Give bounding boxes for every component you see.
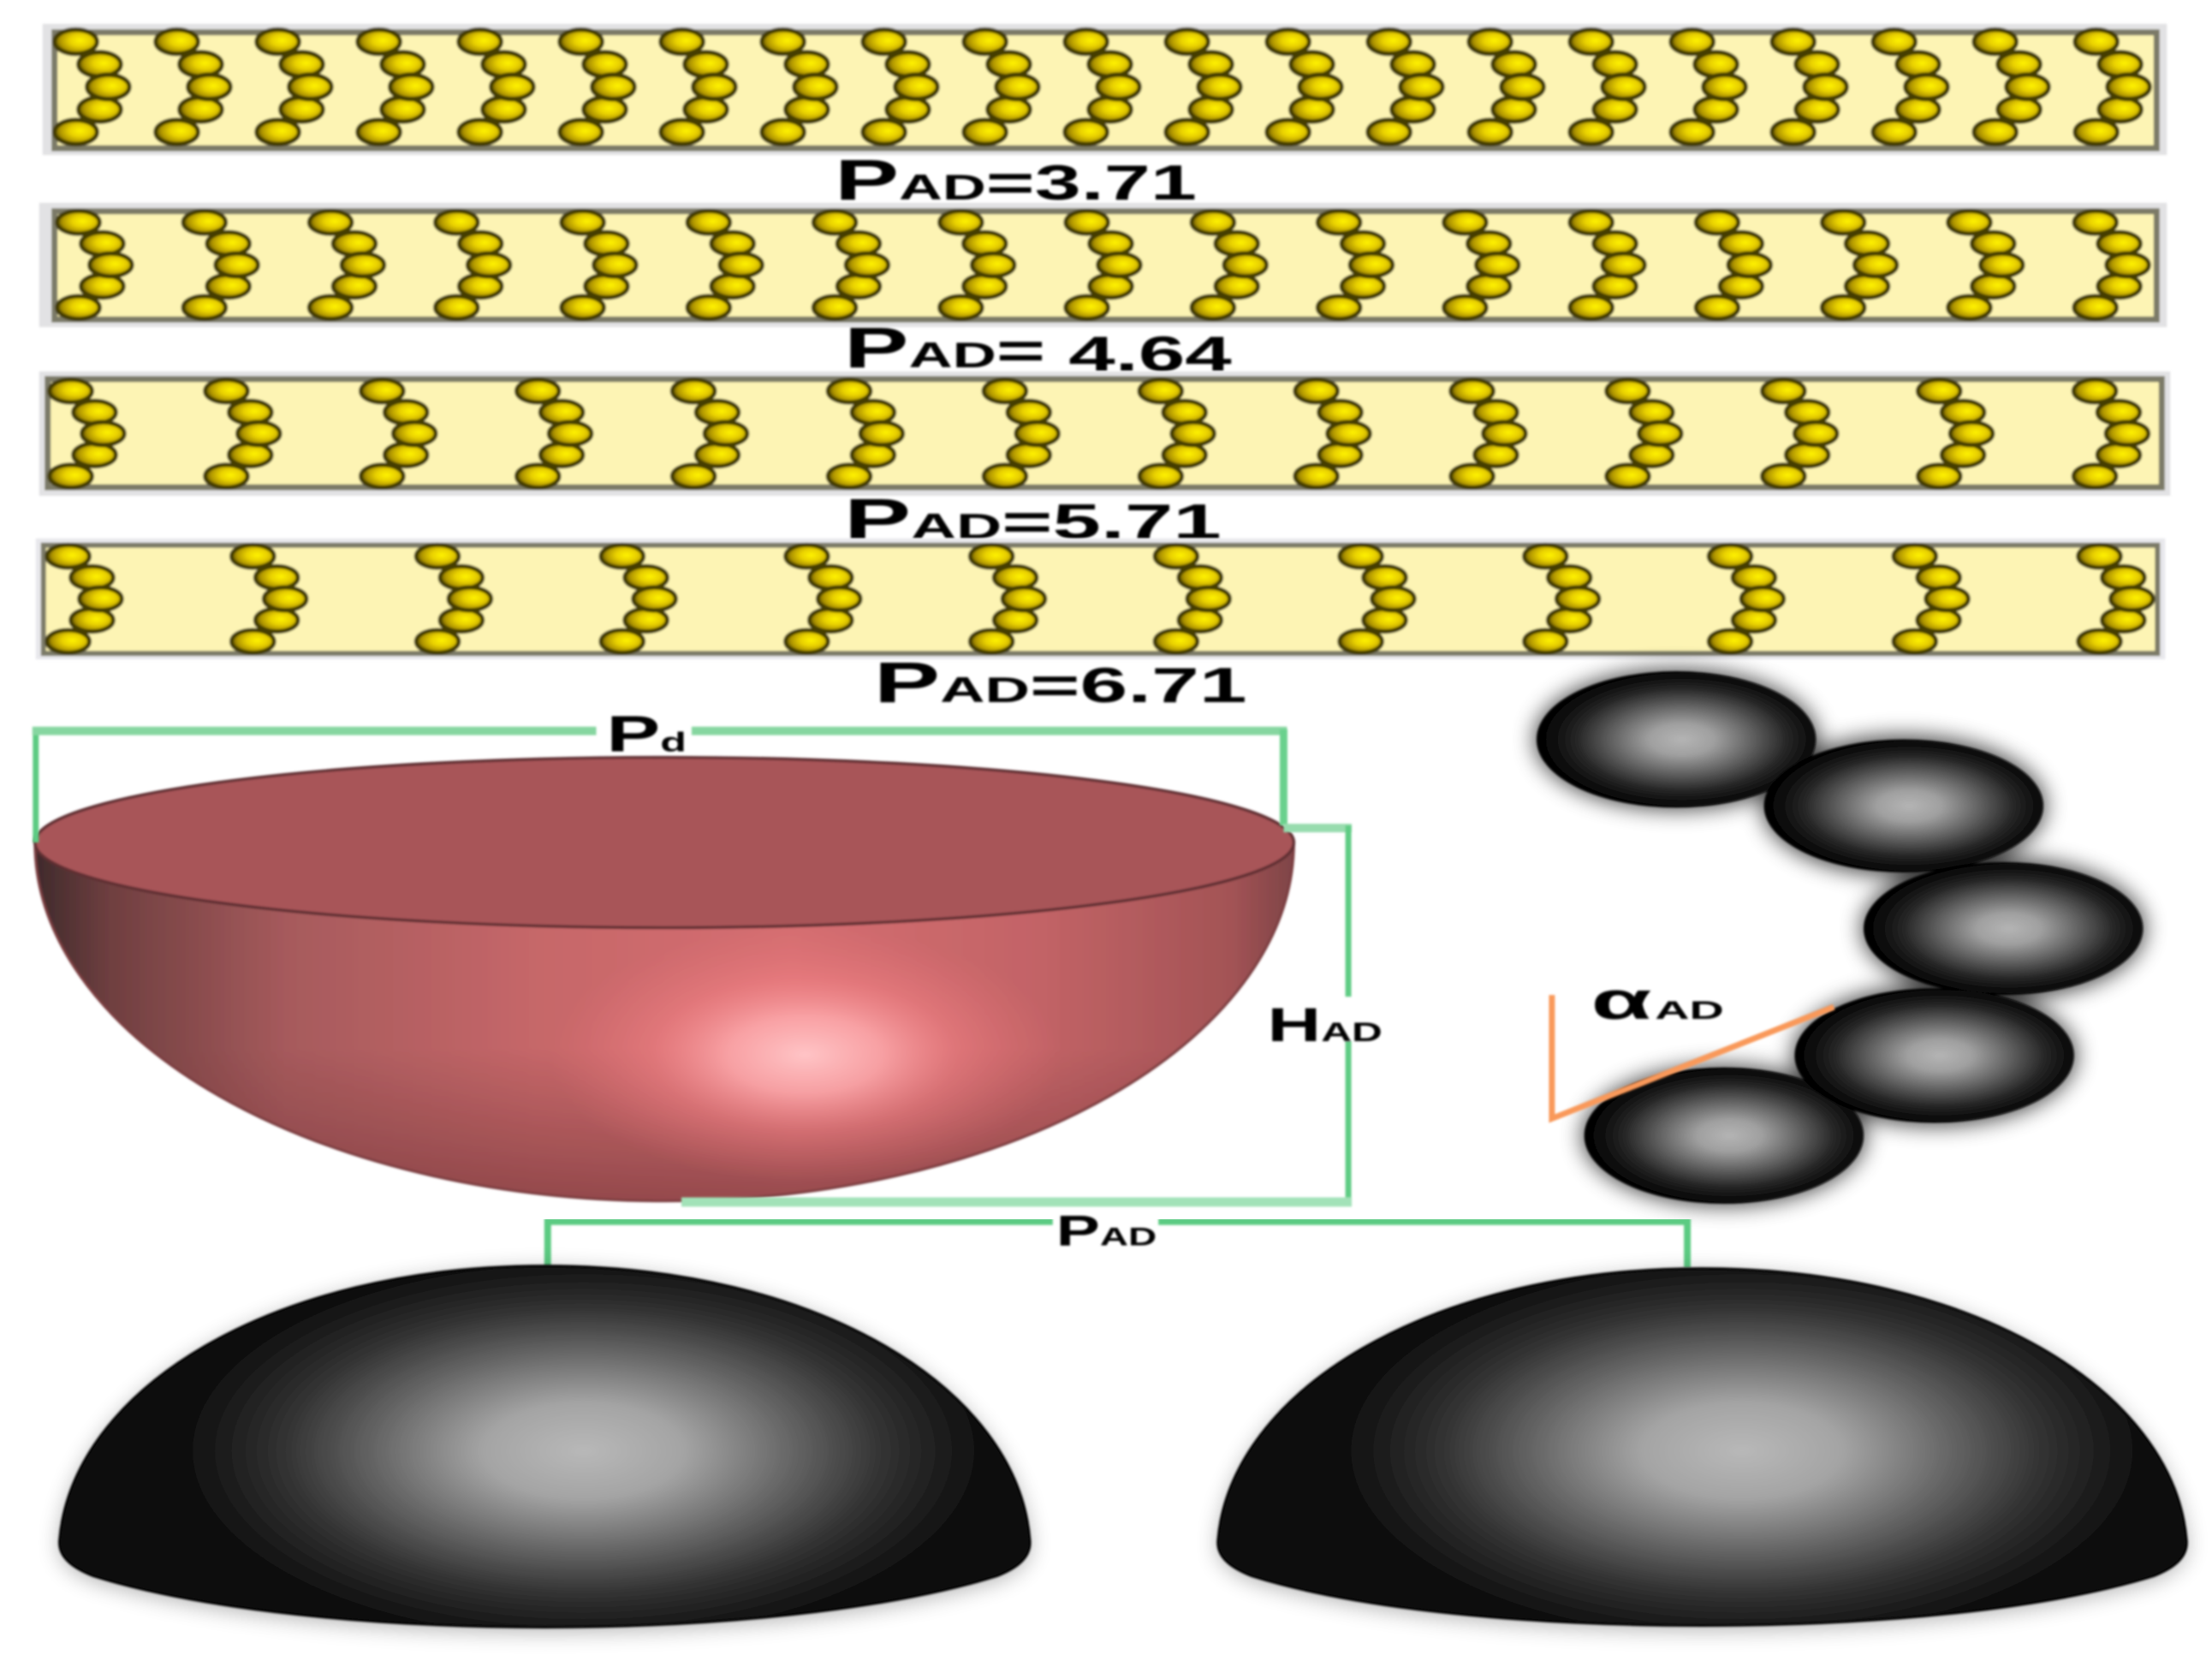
label: PAD=3.71: P AD =3.71	[835, 149, 1197, 212]
bowl: red hemisphere	[35, 758, 1293, 1201]
bowl rim	[35, 758, 1293, 928]
sphere 3	[1864, 862, 2143, 995]
right black dome	[1218, 1269, 2186, 1629]
strand of five black spheres	[1535, 670, 2144, 1206]
dimension frame: Pd, HAD	[33, 729, 1352, 1202]
label: PAD=6.71: P AD =6.71	[874, 652, 1247, 715]
dimension bracket: PAD	[548, 1222, 1687, 1268]
strand bar: PAD 3.71	[43, 24, 2167, 155]
strand bar: PAD 4.64	[39, 203, 2167, 327]
label: PAD=5.71: P AD =5.71	[844, 488, 1222, 551]
left black dome	[60, 1266, 1030, 1631]
angle marker: orange lines	[1552, 995, 1834, 1118]
label: alpha AD: α AD	[1591, 972, 1724, 1031]
sphere 2	[1764, 740, 2043, 872]
label: PAD=4.64: 4.64	[1068, 327, 1232, 382]
label: PAD=4.64: P AD =	[844, 317, 1026, 380]
label: Pd: P d	[606, 705, 687, 763]
sphere 1	[1537, 671, 1816, 807]
label: HAD: H AD	[1268, 998, 1382, 1051]
label: PAD: P AD	[1056, 1207, 1157, 1255]
strand bar: PAD 6.71	[36, 539, 2165, 659]
sphere 5	[1585, 1068, 1864, 1204]
strand bar: PAD 5.71	[39, 372, 2170, 496]
sphere 4	[1794, 988, 2074, 1122]
